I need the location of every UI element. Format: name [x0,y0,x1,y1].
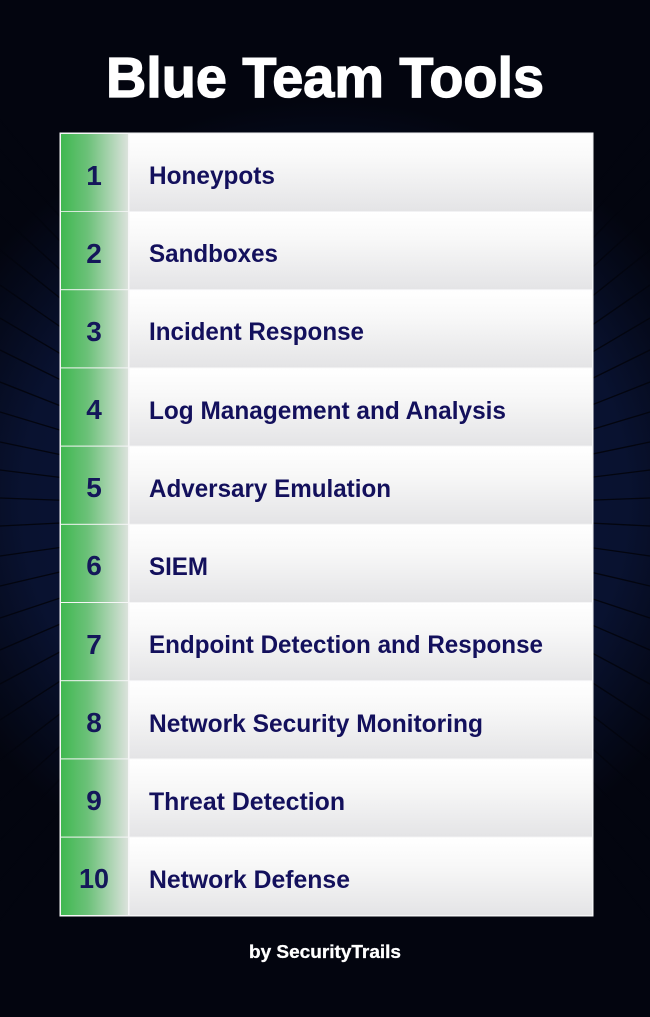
row 1: Honeypots: Honeypots [149,162,275,190]
row 7: Endpoint Detection and Response [61,603,592,680]
row 9: Threat Detection: 9 [86,785,102,816]
footer credit: by SecurityTrails [249,942,401,962]
row 9: Threat Detection: Threat Detection [149,788,345,816]
row 2: Sandboxes: Sandboxes [149,240,278,268]
row 8: Network Security Monitoring: Network Security Monitoring [149,710,483,738]
row 3: Incident Response: 3 [86,316,102,347]
row 1: Honeypots: 1 [86,160,102,191]
row 10: Network Defense [61,838,592,915]
row 2: Sandboxes [61,212,592,289]
panel: tools table [60,132,594,916]
row 4: Log Management and Analysis: Log Management and Analysis [149,397,506,425]
row 6: SIEM [61,525,592,602]
row 9: Threat Detection [61,759,592,837]
row 5: Adversary Emulation [61,447,592,524]
row 6: SIEM: SIEM [149,553,208,581]
row 10: Network Defense: 10 [79,863,109,894]
row 7: Endpoint Detection and Response: Endpoint Detection and Response [149,631,543,659]
row 10: Network Defense: Network Defense [149,866,350,894]
row 8: Network Security Monitoring [61,681,592,758]
row 3: Incident Response: Incident Response [149,318,364,346]
row 4: Log Management and Analysis: 4 [86,394,102,425]
row 3: Incident Response [61,290,592,367]
row 6: SIEM: 6 [86,550,102,581]
row 5: Adversary Emulation: 5 [86,472,102,503]
row 4: Log Management and Analysis [61,368,592,446]
row 7: Endpoint Detection and Response: 7 [86,629,102,660]
row 8: Network Security Monitoring: 8 [86,707,102,738]
row 1: Honeypots [61,134,592,211]
row 2: Sandboxes: 2 [86,238,102,269]
title: Blue Team Tools [106,46,544,110]
row 5: Adversary Emulation: Adversary Emulation [149,475,391,503]
